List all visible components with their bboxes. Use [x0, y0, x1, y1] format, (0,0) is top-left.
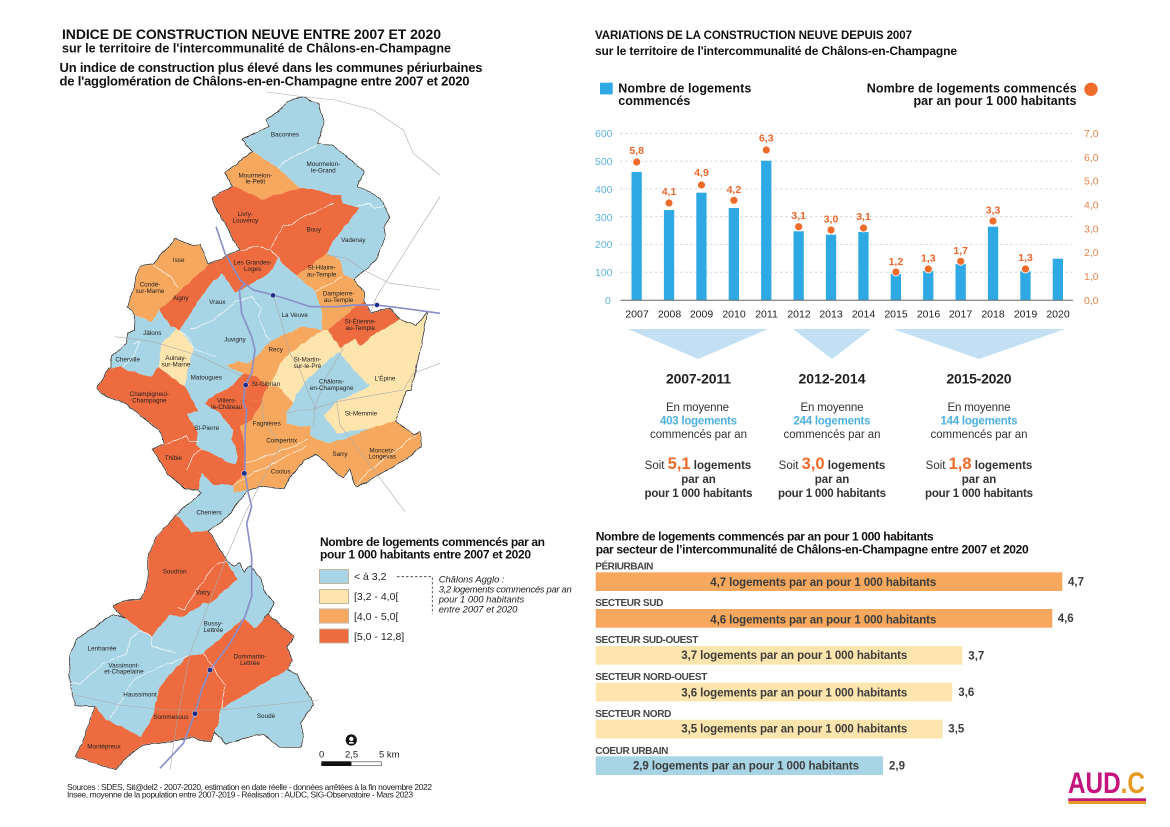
sources: Insee, moyenne de la population entre 2007-2019 - Réalisation : AUDC, SIG-Observatoire - Mars 2023 — [67, 790, 413, 800]
title: chart: sur le territoire de l'intercommunalité de Châlons-en-Champagne — [595, 44, 957, 58]
dot values: 1,3 — [1018, 252, 1033, 264]
commune labels: Fagnières — [253, 421, 281, 428]
period summary: 2015-2020: Soit 1,8 logements — [926, 455, 1032, 473]
sector bars — [596, 572, 1062, 591]
title: chart — [595, 30, 957, 58]
period summary: 2015-2020: commencés par an — [930, 429, 1028, 441]
baseline — [620, 299, 1073, 301]
sector bar text: 3,7 logements par an pour 1 000 habitants — [681, 650, 907, 662]
commune labels: Champagne — [132, 397, 167, 404]
year labels: 2013 — [819, 308, 843, 320]
sector bar text: 3,6 logements par an pour 1 000 habitants — [681, 688, 907, 700]
commune labels: le-Château — [211, 404, 243, 411]
commune labels: Bouy — [306, 226, 322, 233]
chart legend: dots: par an pour 1 000 habitants — [914, 94, 1077, 108]
period summary: 2012-2014: Soit 3,0 logements — [779, 455, 885, 473]
sources: Sources : SDES, Sit@del2 - 2007-2020, estimation en date réelle - données arrêtées à la fin novembre 2022 — [67, 782, 432, 792]
period summary: 2012-2014: 2012-2014 — [798, 370, 866, 386]
commune labels: Condé- — [140, 282, 160, 289]
sector values: 3,5 — [948, 724, 965, 736]
right axis: 1,0 — [1084, 271, 1099, 283]
commune labels: St-Martin- — [293, 357, 321, 364]
period summary: 2007-2011 — [644, 370, 752, 500]
roads — [70, 92, 440, 770]
commune labels: Compertrix — [266, 438, 298, 445]
map of communes — [70, 92, 440, 770]
commune labels: Châlons- — [319, 378, 344, 385]
year labels: 2017 — [949, 308, 972, 320]
commune labels: La Veuve — [281, 312, 308, 319]
dot values: 5,8 — [629, 145, 644, 157]
commune labels: le-Grand — [311, 167, 336, 174]
scale bar — [319, 749, 400, 766]
sector labels: SECTEUR SUD-OUEST — [595, 635, 698, 646]
dot values: 3,1 — [856, 211, 871, 223]
left axis: 100 — [595, 267, 613, 279]
chart legend: bars — [600, 82, 751, 108]
left axis: 0 — [605, 295, 611, 307]
logo: AUD.C: AUD.C — [1068, 767, 1145, 800]
title: chart: VARIATIONS DE LA CONSTRUCTION NEUVE DEPUIS 2007 — [595, 30, 912, 42]
commune labels: Livry- — [238, 211, 253, 218]
title: map: de l'agglomération de Châlons-en-en-Champagne entre 2007 et 2020 — [60, 73, 470, 88]
right axis: 2,0 — [1084, 247, 1099, 259]
sector bar text — [633, 577, 936, 772]
callout: Châlons Agglo: pour 1 000 habitants — [438, 594, 524, 605]
commune labels: Soudé — [257, 713, 276, 720]
period arrows — [628, 329, 1065, 359]
sector labels: COEUR URBAIN — [595, 746, 668, 757]
year labels: 2018 — [981, 308, 1005, 320]
sector bar text: 3,5 logements par an pour 1 000 habitants — [681, 723, 907, 735]
legend labels: < à 3,2 — [354, 571, 387, 583]
period summary: 2007-2011: pour 1 000 habitants — [644, 488, 752, 500]
sector bar text: 2,9 logements par an pour 1 000 habitants — [633, 760, 859, 772]
commune fills with boundaries — [70, 98, 427, 769]
commune labels: Dommartin- — [233, 654, 267, 661]
right axis: 4,0 — [1084, 200, 1099, 212]
commune labels: Vatry — [196, 589, 211, 596]
commune labels: et-Chapelaine — [104, 669, 144, 676]
stations — [192, 293, 379, 716]
dot values: 3,3 — [986, 204, 1000, 216]
dot values: 3,0 — [824, 214, 838, 226]
period summary: 2015-2020: pour 1 000 habitants — [925, 488, 1033, 500]
commune labels: le-Petit — [245, 179, 265, 186]
commune labels: Vraux — [209, 299, 226, 306]
commune labels: sur-le-Pré — [293, 363, 322, 370]
right axis: 6,0 — [1084, 152, 1099, 164]
commune labels: Moncetz- — [369, 447, 395, 454]
callout: Châlons Agglo: Châlons Agglo : — [439, 574, 505, 585]
commune labels: Villers- — [217, 398, 236, 405]
commune labels: Jâlons — [143, 330, 161, 337]
year labels: 2012 — [787, 308, 811, 320]
commune labels: Mourmelon- — [306, 161, 340, 168]
commune labels: Lettrée — [203, 627, 224, 634]
year labels: 2011 — [755, 308, 778, 320]
commune labels: Vassimont- — [108, 662, 140, 669]
title: map: sur le territoire de l'intercommunalité de Châlons-en-Champagne — [62, 42, 451, 56]
period summary: 2015-2020: 2015-2020 — [946, 370, 1012, 386]
left axis: 200 — [595, 239, 613, 251]
period summary: 2007-2011: Soit 5,1 logements — [645, 455, 751, 473]
legend title: pour 1 000 habitants entre 2007 et 2020 — [320, 548, 531, 562]
sector bar text: 4,6 logements par an pour 1 000 habitants — [710, 615, 936, 627]
commune labels: Les Grandes- — [233, 260, 272, 267]
dot values: 4,2 — [727, 184, 741, 196]
dot values: 1,7 — [953, 245, 968, 257]
commune labels: Thibie — [165, 455, 182, 462]
commune labels: Loges — [244, 266, 261, 273]
commune labels: Montépreux — [87, 743, 122, 750]
commune labels: Coolus — [271, 469, 291, 476]
sector labels: PÉRIURBAIN — [595, 559, 653, 572]
legend swatches — [320, 570, 348, 643]
sector values: 4,7 — [1068, 577, 1084, 589]
legend labels: [5,0 - 12,8] — [354, 631, 404, 643]
dot values: 3,1 — [791, 210, 806, 222]
commune labels — [87, 131, 396, 750]
title: sector chart: Nombre de logements commencés par an pour 1 000 habitants — [596, 530, 934, 544]
year labels: 2020 — [1046, 308, 1070, 320]
commune labels: Lettrée — [240, 660, 260, 667]
dot values — [629, 132, 1033, 268]
commune labels: Baconnes — [271, 131, 299, 138]
commune labels: Aigny — [173, 295, 189, 302]
scale bar: 5 km — [379, 749, 400, 760]
period summary: 2012-2014: commencés par an — [784, 429, 880, 441]
year labels: 2016 — [917, 308, 940, 320]
title: sector chart: par secteur de l’intercommunalité de Châlons-en-Champagne entre 2007 et 2020 — [596, 542, 1029, 556]
period summary: 2012-2014 — [778, 370, 886, 500]
sector bar chart — [595, 559, 1084, 775]
commune labels: Champigneul- — [130, 391, 169, 398]
scale bar: 0 — [319, 749, 324, 760]
title: sector chart — [596, 530, 1029, 556]
legend labels — [354, 571, 404, 643]
year labels: 2010 — [722, 308, 746, 320]
sector labels — [595, 559, 707, 757]
period summary: 2007-2011: commencés par an — [650, 429, 747, 441]
commune labels: au-Temple — [307, 272, 337, 279]
legend labels: [4,0 - 5,0[ — [354, 611, 398, 623]
dot values: 4,1 — [662, 186, 676, 198]
right axis: 5,0 — [1084, 176, 1099, 188]
commune labels: Isse — [173, 257, 185, 264]
dot values: 1,2 — [889, 256, 903, 268]
commune labels: Sommesous — [153, 714, 189, 721]
commune labels: St-Gibrian — [252, 381, 281, 388]
commune labels: au-Temple — [324, 297, 354, 304]
left axis: 600 — [595, 128, 613, 140]
left axis: 500 — [595, 156, 613, 168]
grid lines — [620, 133, 1074, 272]
left axis: 300 — [595, 212, 613, 224]
commune labels: Longevas — [369, 454, 396, 461]
period summary: 2007-2011: par an — [681, 474, 716, 486]
commune labels: Louvercy — [232, 217, 259, 224]
sector labels: SECTEUR NORD-OUEST — [595, 672, 707, 683]
year labels: 2019 — [1014, 308, 1037, 320]
commune labels: au-Temple — [346, 325, 376, 332]
year labels: 2014 — [852, 308, 875, 320]
callout: Châlons Agglo: entre 2007 et 2020 — [439, 604, 518, 615]
period summary: 2012-2014: par an — [815, 474, 849, 486]
dot values: 1,3 — [921, 252, 936, 264]
year labels: 2015 — [884, 308, 908, 320]
period summary: 2015-2020: par an — [962, 474, 996, 486]
callout: Châlons Agglo — [438, 574, 572, 615]
dot values: 4,9 — [694, 167, 709, 179]
commune labels: Haussimont — [123, 691, 157, 698]
sector labels: SECTEUR NORD — [595, 709, 671, 720]
commune labels: Sarry — [332, 451, 348, 458]
commune labels: Aulnay- — [165, 355, 187, 362]
period summary: 2012-2014: 244 logements — [794, 416, 870, 428]
commune labels: Cherville — [115, 357, 140, 364]
commune labels: Juvigny — [224, 336, 247, 343]
commune labels: sur-Marne — [162, 361, 191, 368]
right axis: 3,0 — [1084, 224, 1099, 236]
legend labels: [3,2 - 4,0[ — [354, 591, 398, 603]
sector bar text: 4,7 logements par an pour 1 000 habitants — [710, 577, 936, 589]
commune labels: St-Hilaire- — [308, 265, 336, 272]
title: map: Un indice de construction plus élevé dans les communes périurbaines — [60, 60, 482, 75]
year labels: 2007 — [625, 308, 649, 320]
right axis: 7,0 — [1084, 128, 1099, 140]
commune labels: Lenharrée — [88, 645, 117, 652]
year labels: 2008 — [658, 308, 681, 320]
commune labels: St-Memmie — [345, 411, 378, 418]
rivers and canal — [160, 227, 440, 768]
sector values: 2,9 — [889, 760, 905, 772]
map legend — [320, 535, 572, 643]
sector values: 3,6 — [958, 687, 974, 699]
dots — [633, 146, 1030, 276]
commune labels: en-Champagne — [310, 385, 354, 392]
period summary: 2015-2020: En moyenne — [948, 402, 1010, 414]
commune labels: Recy — [268, 347, 284, 354]
sector values: 4,6 — [1058, 613, 1074, 625]
commune labels: Mourmelon- — [238, 172, 272, 179]
commune labels: St-Pierre — [194, 425, 220, 432]
legend title: Nombre de logements commencés par an — [320, 535, 545, 549]
period summary: 2015-2020: 144 logements — [940, 416, 1018, 428]
left axis: 400 — [595, 184, 613, 196]
commune labels: L'Épine — [375, 373, 396, 382]
year labels — [625, 308, 1070, 320]
sector values: 3,7 — [968, 650, 984, 662]
legend title — [320, 535, 545, 562]
commune labels: Cheniers — [196, 509, 222, 516]
chart legend: bars: Nombre de logements — [618, 82, 751, 96]
icon: north arrow — [346, 734, 357, 746]
commune labels: Soudron — [163, 569, 187, 576]
title: map: INDICE DE CONSTRUCTION NEUVE ENTRE 2007 ET 2020 — [62, 26, 441, 42]
period summary: 2015-2020 — [925, 370, 1033, 500]
scale bar: 2,5 — [345, 749, 358, 760]
sector labels: SECTEUR SUD — [595, 598, 663, 609]
left axis — [595, 128, 613, 307]
year labels: 2009 — [690, 308, 713, 320]
sector values — [889, 577, 1084, 772]
commune labels: sur-Marne — [136, 288, 165, 295]
title: map — [60, 26, 482, 88]
commune labels: Matougues — [191, 374, 222, 381]
period summary: 2007-2011: 2007-2011 — [666, 370, 731, 386]
chart legend: bars: commencés — [618, 94, 690, 108]
bars — [632, 161, 1063, 300]
legend callout line — [397, 577, 432, 614]
commune labels: St-Étienne- — [345, 317, 376, 326]
chart legend: dots: Nombre de logements commencés — [867, 82, 1077, 96]
commune labels: Dampierre- — [323, 291, 354, 298]
right axis: 0,0 — [1084, 295, 1099, 307]
commune labels: Vadenay — [341, 237, 366, 244]
chart legend: dots — [867, 82, 1098, 108]
commune labels: Bussy- — [204, 621, 223, 628]
sources — [67, 782, 432, 800]
callout: Châlons Agglo: 3,2 logements commencés par an — [439, 584, 572, 595]
period summary: 2012-2014: pour 1 000 habitants — [778, 488, 886, 500]
combo chart — [595, 128, 1099, 320]
period summary: 2007-2011: 403 logements — [660, 416, 737, 428]
period summary: 2012-2014: En moyenne — [800, 402, 864, 414]
period summary: 2007-2011: En moyenne — [666, 402, 729, 414]
dot values: 6,3 — [759, 132, 774, 144]
right axis — [1084, 128, 1099, 307]
